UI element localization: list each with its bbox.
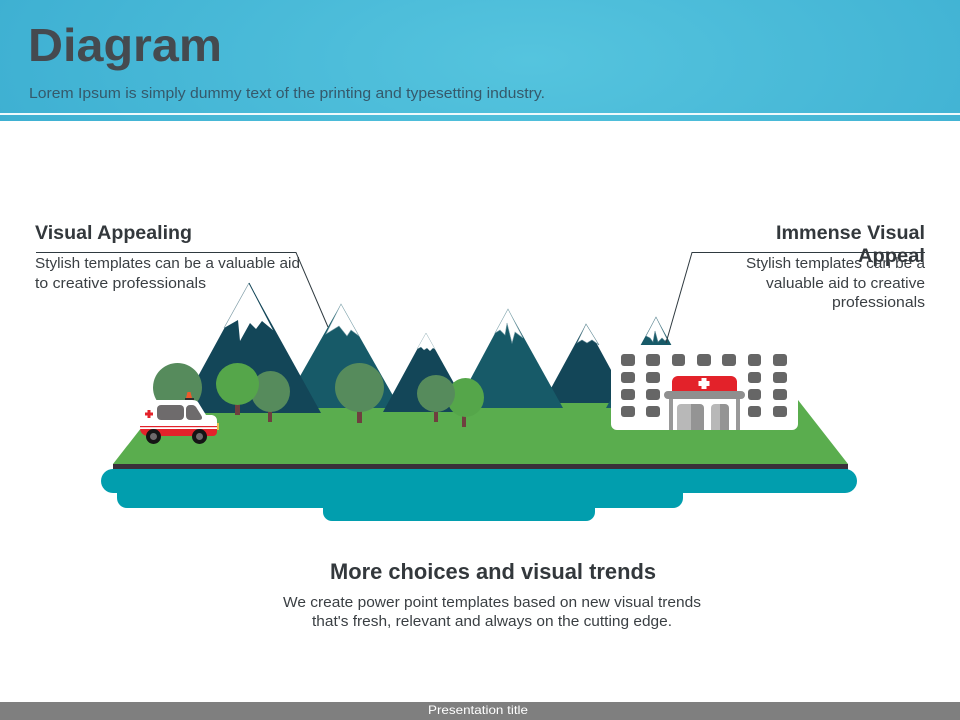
callout: left [35,223,328,327]
body text: to creative professionals [35,276,206,292]
windows [621,354,787,417]
body text: professionals [832,295,925,311]
mountain 2 [282,304,400,408]
body text: Stylish templates can be a valuable aid [35,256,300,272]
doors [677,404,729,430]
mountain 1 [178,283,321,413]
trees [153,363,484,427]
mountain 6 behind hospital [606,317,706,408]
bottom text: We create power point templates based on new visual trends [283,595,701,611]
tree [447,378,484,427]
pillars [669,399,740,430]
tree [335,363,384,423]
illustration: landscape [101,283,857,521]
bottom text [283,595,701,630]
tree [216,363,259,415]
footer bar [0,702,960,720]
callout leader line [36,252,328,327]
body text: valuable aid to creative [766,276,925,292]
ground [113,400,848,464]
heading: Visual Appealing [35,223,192,244]
mountain 5 [543,324,629,403]
header band [0,0,960,121]
heading: Appeal [858,246,925,267]
mountain 4 [455,309,563,408]
body text: Stylish templates can be a [746,256,926,272]
bottom heading: More choices and visual trends [330,559,656,584]
mountain 3 [383,333,470,412]
sign cross [698,378,710,389]
callout: right [666,223,926,343]
title: Diagram [28,19,222,71]
subtitle: Lorem Ipsum is simply dummy text of the printing and typesetting industry. [29,85,545,102]
footer bar: Presentation title [428,703,528,717]
tree [251,371,290,422]
heading [776,223,925,267]
canopy [664,391,745,399]
heading: Immense Visual [776,223,925,244]
tree [153,363,202,412]
body text [746,256,926,311]
water [101,469,857,521]
mountain range [178,283,706,413]
callout leader line [666,252,925,343]
ambulance [140,392,219,444]
body text [35,256,300,292]
red sign [672,376,737,392]
tree [417,375,455,422]
shore edge [113,464,848,469]
hospital [611,345,798,430]
bottom text: that's fresh, relevant and always on the cutting edge. [312,614,672,630]
